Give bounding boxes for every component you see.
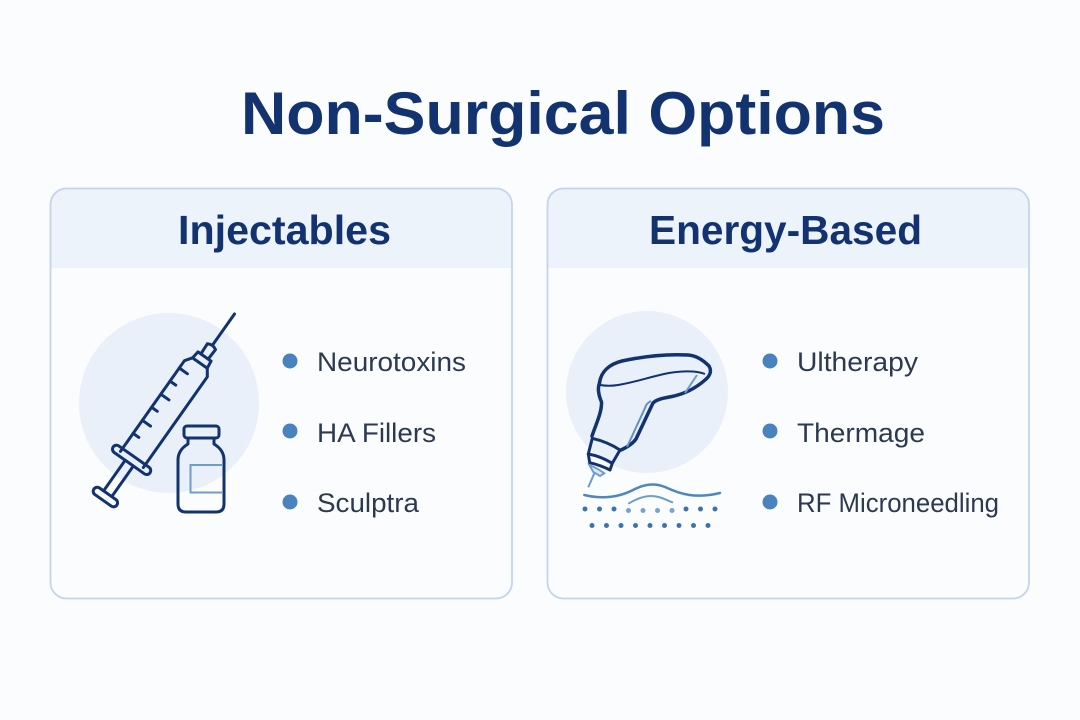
panel outline: injectables — [50, 188, 512, 598]
panel header: injectables — [50, 188, 512, 268]
title: Non-Surgical Options — [241, 79, 885, 147]
heading: energy-based: Energy-Based — [649, 207, 922, 253]
icon: syringe — [85, 301, 253, 513]
panel outline: energy-based — [548, 188, 1029, 598]
bullet: Neurotoxins: Neurotoxins — [317, 347, 466, 377]
icon: syringe and vial — [79, 301, 259, 513]
bullet: Thermage: Thermage — [797, 418, 925, 448]
list: energy-based — [762, 347, 999, 518]
list: injectables — [282, 347, 466, 518]
icon background circle — [79, 313, 259, 493]
icon: ultrasound handpiece over skin — [566, 311, 728, 528]
bullet: RF Microneedling: RF Microneedling — [797, 488, 999, 518]
bullet: Sculptra: Sculptra — [317, 488, 420, 518]
icon background circle — [566, 311, 728, 473]
icon: handpiece — [588, 355, 710, 487]
icon: vial — [178, 426, 224, 512]
bullet: Ultherapy: Ultherapy — [797, 347, 919, 377]
icon: skin waves — [584, 485, 720, 503]
panel: injectables — [50, 188, 512, 598]
heading: injectables: Injectables — [178, 207, 391, 253]
icon: skin dots — [582, 506, 718, 528]
bullet: HA Fillers: HA Fillers — [317, 418, 436, 448]
panel header: energy-based — [548, 188, 1029, 268]
panel: energy-based — [548, 188, 1029, 598]
